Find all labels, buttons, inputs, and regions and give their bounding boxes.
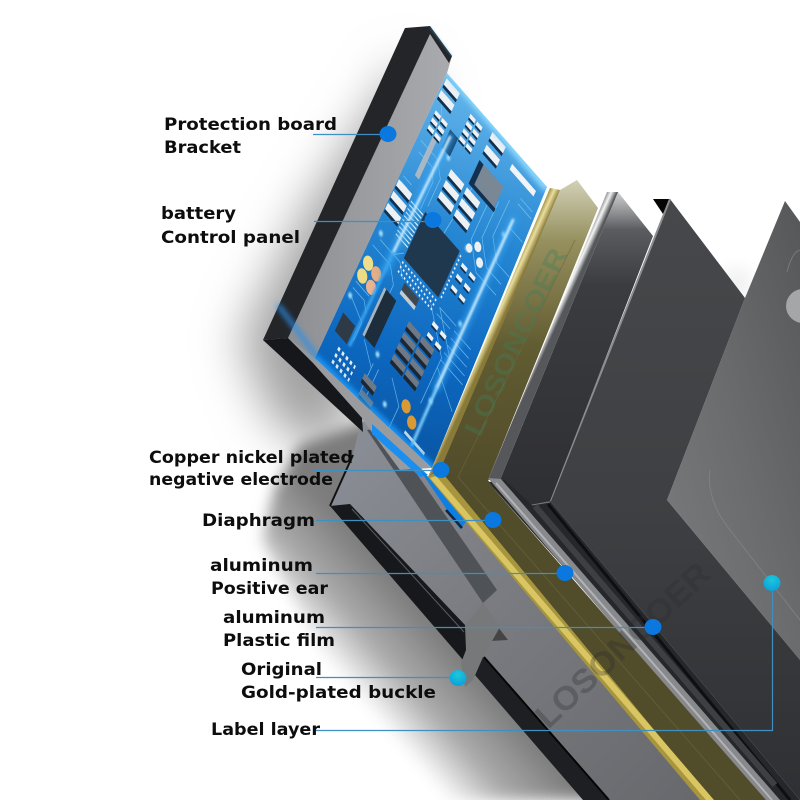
layer: label layer panel bbox=[667, 201, 800, 660]
layer: bracket lower panel and strip bbox=[330, 410, 712, 800]
label: protection board bracket: Protection board bbox=[164, 115, 337, 135]
infographic: exploded battery layers bbox=[150, 26, 800, 800]
label: label layer: Label layer bbox=[211, 720, 321, 740]
label: aluminum positive ear: Positive ear bbox=[211, 579, 329, 599]
label: copper nickel plated negative electrode: negative electrode bbox=[149, 470, 333, 490]
label: original gold-plated buckle bbox=[241, 660, 436, 703]
component grid: left bbox=[384, 179, 424, 252]
gold-plated buckle bbox=[461, 603, 500, 687]
label: battery control panel bbox=[161, 204, 300, 248]
label: aluminum positive ear bbox=[210, 556, 329, 599]
components: lower bbox=[331, 287, 434, 456]
background haze bbox=[240, 60, 745, 800]
main chip bbox=[398, 212, 462, 312]
glow lines bbox=[315, 70, 546, 468]
coins bbox=[357, 256, 382, 296]
layer: positive ear bbox=[488, 192, 800, 800]
label: aluminum plastic film: aluminum bbox=[223, 608, 325, 628]
label: protection board bracket: Bracket bbox=[164, 138, 241, 158]
label: original gold-plated buckle: Gold-plated buckle bbox=[241, 683, 436, 703]
label: battery control panel: Control panel bbox=[161, 228, 300, 248]
component row: top bbox=[415, 78, 536, 212]
label: diaphragm: Diaphragm bbox=[202, 511, 315, 531]
label: aluminum plastic film bbox=[223, 608, 335, 651]
layer: plastic film bbox=[550, 199, 800, 800]
label: copper nickel plated negative electrode: Copper nickel plated bbox=[149, 448, 353, 468]
battery control panel circuit board bbox=[315, 70, 551, 475]
leader lines bbox=[313, 134, 772, 730]
blue edge strip bbox=[372, 27, 466, 529]
label: battery control panel: battery bbox=[161, 204, 236, 224]
label: protection board bracket bbox=[164, 115, 337, 158]
gold strip bbox=[428, 188, 714, 800]
glow dots bbox=[347, 154, 506, 409]
marker dots bbox=[380, 126, 780, 686]
circuit traces bbox=[351, 104, 532, 428]
watermark: vertical: LOSONCOER bbox=[458, 243, 573, 441]
label: aluminum positive ear: aluminum bbox=[210, 556, 313, 576]
watermark: diagonal: LOSONCOER bbox=[528, 554, 717, 735]
components: right bbox=[400, 242, 484, 352]
protection board bracket bbox=[263, 26, 452, 470]
component grid: centre bbox=[437, 169, 480, 233]
label: original gold-plated buckle: Original bbox=[241, 660, 322, 680]
label: copper nickel plated negative electrode bbox=[149, 448, 353, 490]
label: aluminum plastic film: Plastic film bbox=[223, 631, 335, 651]
layer: diaphragm bbox=[428, 180, 766, 800]
